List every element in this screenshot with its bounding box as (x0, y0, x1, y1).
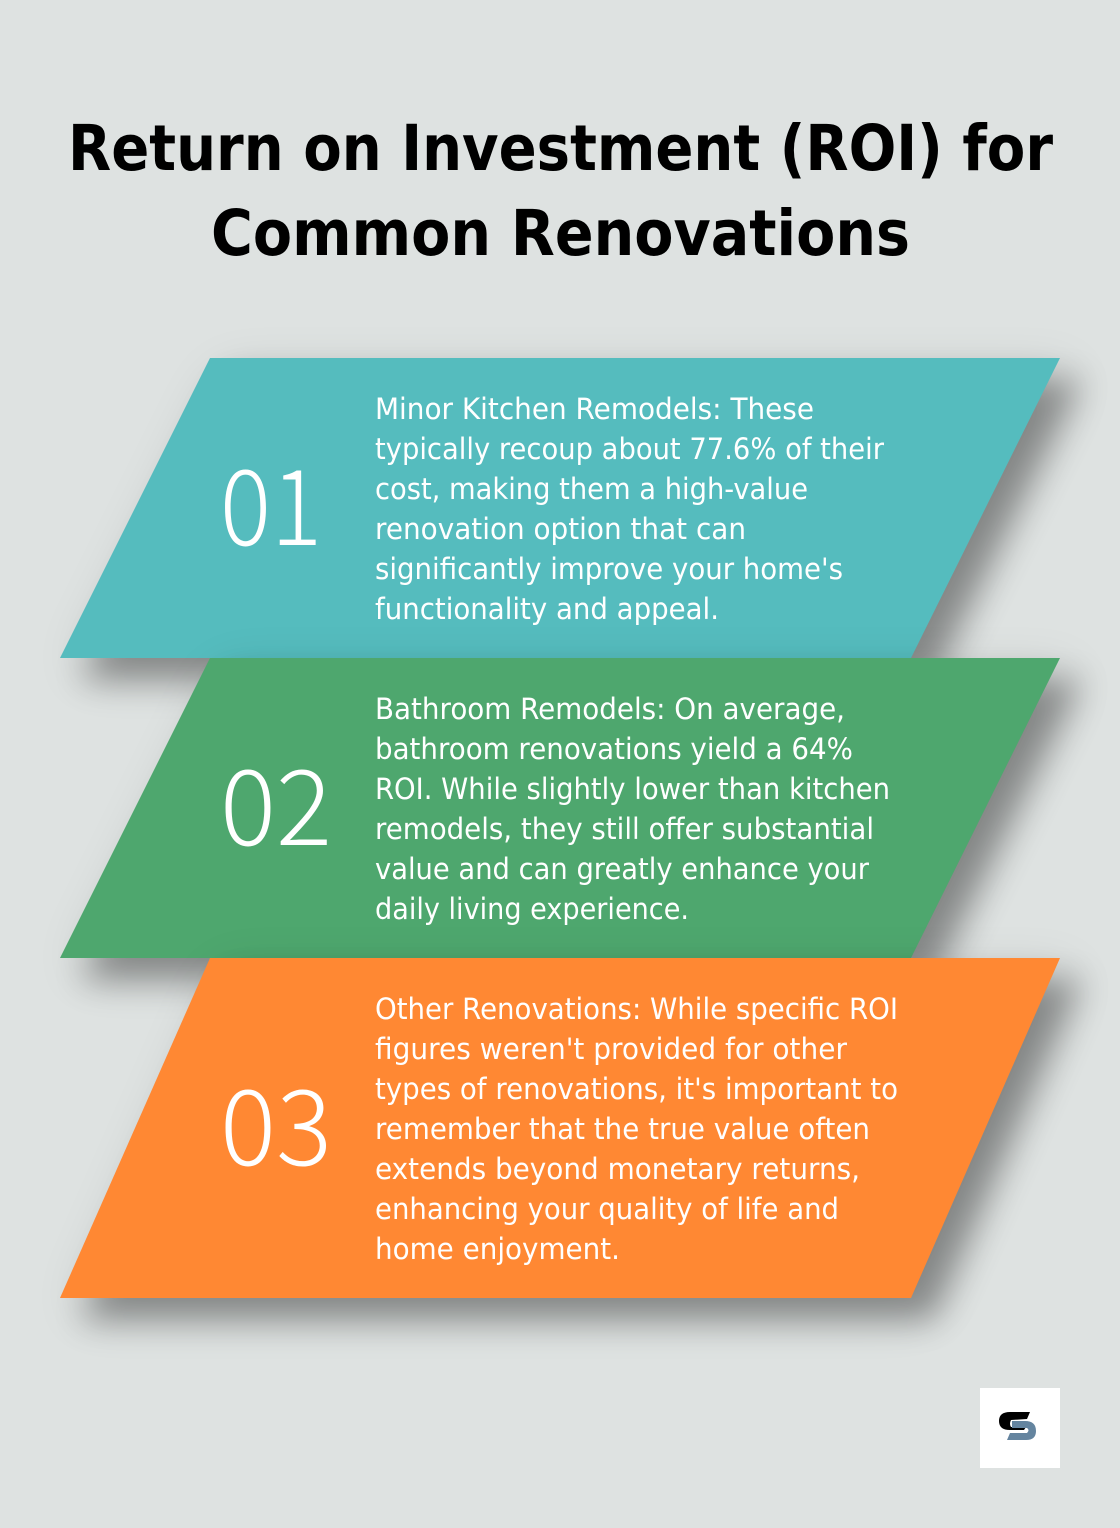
text block 03: figures weren't provided for other (375, 1032, 848, 1066)
number 03: 03 (220, 1044, 332, 1196)
text block 02: value and can greatly enhance your (375, 852, 870, 886)
text block 01: Minor Kitchen Remodels: These (375, 392, 814, 426)
text block 01: functionality and appeal. (375, 592, 719, 626)
title: Common Renovations (211, 197, 910, 270)
text block 02: daily living experience. (375, 892, 689, 926)
title (68, 112, 1053, 270)
panel: 01 minor kitchen remodels (60, 358, 1082, 680)
text block 03: Other Renovations: While specific ROI (375, 992, 898, 1026)
text block 02: remodels, they still offer substantial (375, 812, 874, 846)
text block 01: typically recoup about 77.6% of their (375, 432, 885, 466)
panel: 03 other renovations (60, 958, 1082, 1320)
text block 01 (375, 392, 885, 626)
text block 02: bathroom renovations yield a 64% (375, 732, 853, 766)
text block 03: types of renovations, it's important to (375, 1072, 898, 1106)
text block 02: ROI. While slightly lower than kitchen (375, 772, 890, 806)
text block 01: renovation option that can (375, 512, 746, 546)
text block 03 (375, 992, 898, 1266)
text block 01: cost, making them a high-value (375, 472, 808, 506)
text block 03: home enjoyment. (375, 1232, 620, 1266)
text block 03: remember that the true value often (375, 1112, 870, 1146)
text block 02: Bathroom Remodels: On average, (375, 692, 845, 726)
text block 01: significantly improve your home's (375, 552, 843, 586)
text block 02 (375, 692, 890, 926)
text block 03: enhancing your quality of life and (375, 1192, 839, 1226)
panel: 02 bathroom remodels (60, 658, 1082, 980)
icon: logo badge (980, 1388, 1060, 1468)
number 01: 01 (220, 424, 322, 576)
number 02: 02 (220, 724, 332, 876)
text block 03: extends beyond monetary returns, (375, 1152, 860, 1186)
